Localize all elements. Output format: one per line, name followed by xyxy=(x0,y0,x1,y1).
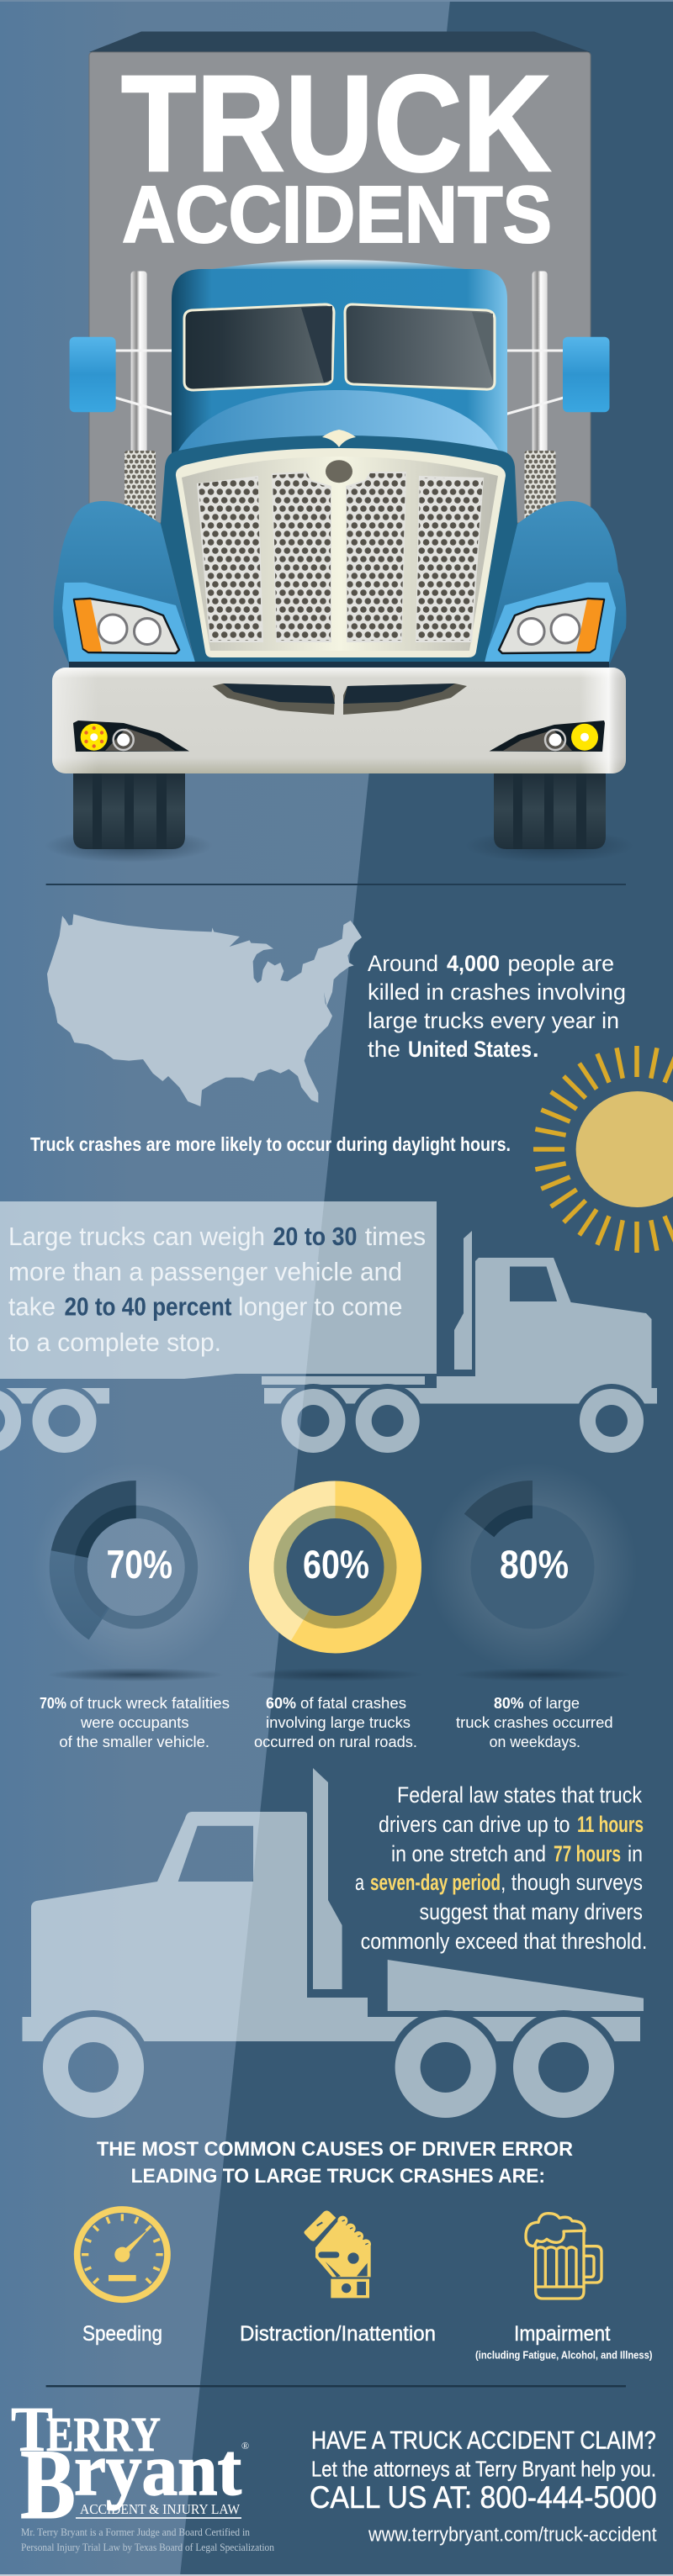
left fog lights xyxy=(73,721,189,752)
text: truck weight and stopping distance xyxy=(8,1222,426,1357)
trailer box xyxy=(89,52,591,523)
bumper xyxy=(52,668,626,773)
grille xyxy=(176,448,506,657)
left fender xyxy=(53,501,195,664)
hood xyxy=(178,390,500,452)
label: distraction: Distraction/Inattention xyxy=(240,2322,436,2346)
divider xyxy=(46,884,626,885)
text: daylight hours: Truck crashes are more likely to occur during daylight hours. xyxy=(30,1133,511,1155)
map: United States xyxy=(47,914,362,1106)
text: federal hours law xyxy=(355,1782,647,1954)
logo: Terry Bryant: ACCIDENT & INJURY LAW xyxy=(80,2501,241,2517)
disclaimer xyxy=(21,2526,274,2553)
donut chart: 70% xyxy=(31,1462,241,1672)
text: 4,000 people killed: killed in crashes involving xyxy=(368,979,626,1005)
divider xyxy=(46,2385,626,2387)
grille panel 1 xyxy=(197,476,263,642)
illustration: front of blue truck xyxy=(45,32,633,863)
caption: 60%: 60% xyxy=(266,1695,296,1712)
text: federal hours law: Federal law states that truck xyxy=(397,1782,642,1808)
right mirror xyxy=(563,337,609,412)
icon: speedometer xyxy=(77,2209,167,2299)
caption: 70% xyxy=(40,1695,230,1750)
text: federal hours law: , though surveys xyxy=(501,1870,643,1895)
right fog lights xyxy=(490,721,605,752)
right bumper vent xyxy=(343,684,467,715)
text: 4,000 people killed: large trucks every year in xyxy=(368,1008,619,1033)
grille panel 2 xyxy=(272,472,331,642)
label: impairment: Impairment xyxy=(514,2322,611,2346)
text: federal hours law: in xyxy=(628,1841,643,1866)
hood emblem xyxy=(322,430,356,447)
illustration: large truck silhouette xyxy=(22,1768,644,2118)
caption: 70%: of truck wreck fatalities xyxy=(70,1695,230,1712)
grille panel 3 xyxy=(346,472,406,642)
title: ACCIDENTS xyxy=(122,170,552,260)
right exhaust stack xyxy=(525,271,555,521)
text: 4,000 people killed: the xyxy=(368,1037,400,1062)
right tire shadow xyxy=(465,829,633,863)
caption: 60%: involving large trucks xyxy=(266,1714,411,1731)
text: truck weight and stopping distance: 20 to 30 xyxy=(273,1222,357,1251)
text: federal hours law: a xyxy=(355,1870,365,1895)
text: federal hours law: seven-day period xyxy=(370,1870,501,1895)
heading: causes of driver error: LEADING TO LARGE TRUCK CRASHES ARE: xyxy=(131,2165,545,2188)
caption: 60%: occurred on rural roads. xyxy=(254,1734,417,1750)
bumper shadow strip xyxy=(69,662,609,669)
logo: Terry Bryant: ryant xyxy=(74,2430,241,2511)
text: federal hours law: suggest that many drivers xyxy=(419,1899,643,1924)
donut chart: 80% xyxy=(427,1462,638,1672)
left tire xyxy=(73,769,185,849)
caption: 70%: 70% xyxy=(40,1695,66,1712)
text: truck weight and stopping distance: Large trucks can weigh xyxy=(8,1222,265,1251)
title: TRUCK xyxy=(121,46,551,200)
caption: 70%: of the smaller vehicle. xyxy=(59,1734,209,1750)
text: 4,000 people killed: Around xyxy=(368,951,438,976)
left mirror xyxy=(70,337,116,412)
donut chart: 70%: 70% xyxy=(106,1542,172,1586)
grille panel 4 xyxy=(416,476,484,642)
disclaimer: Personal Injury Trial Law by Texas Board of Legal Specialization xyxy=(21,2541,274,2553)
right windshield xyxy=(345,304,495,389)
caption: 60%: of fatal crashes xyxy=(300,1695,406,1712)
caption: 80%: 80% xyxy=(494,1695,523,1712)
text: truck weight and stopping distance: take xyxy=(8,1291,56,1322)
text: truck weight and stopping distance: 20 to 40 percent xyxy=(64,1291,232,1322)
text: federal hours law: drivers can drive up to xyxy=(379,1812,570,1837)
grille frame xyxy=(161,435,517,662)
trailer box roof xyxy=(89,32,591,52)
donut chart: 60%: 60% xyxy=(303,1542,369,1586)
left exhaust stack xyxy=(125,271,156,521)
right headlight xyxy=(499,599,604,653)
caption: 60% xyxy=(254,1695,417,1750)
logo: Terry Bryant xyxy=(11,2394,249,2540)
logo: Terry Bryant: B xyxy=(20,2428,76,2540)
call to action xyxy=(310,2427,657,2547)
donut chart: 80%: 80% xyxy=(500,1542,569,1586)
grille badge xyxy=(326,460,352,483)
caption: 80%: of large xyxy=(528,1695,580,1712)
icon: beer mug xyxy=(526,2214,601,2299)
text: federal hours law: in one stretch and xyxy=(391,1841,546,1866)
donut shadows xyxy=(47,1668,631,1681)
caption: 80%: truck crashes occurred xyxy=(456,1714,613,1731)
cab xyxy=(172,260,507,504)
text: 4,000 people killed: . xyxy=(533,1037,539,1062)
left bumper vent xyxy=(212,684,335,715)
right fender xyxy=(483,501,627,664)
illustration: truck and trailer silhouette xyxy=(0,1201,657,1453)
logo: Terry Bryant: T xyxy=(11,2394,53,2465)
mirror brackets xyxy=(115,351,564,414)
text: truck weight and stopping distance: more than a passenger vehicle and xyxy=(8,1257,402,1286)
title xyxy=(121,46,552,260)
text: 4,000 people killed: people are xyxy=(508,951,614,976)
caption: 80% xyxy=(456,1695,613,1750)
label: speeding: Speeding xyxy=(82,2322,162,2346)
text: federal hours law: 77 hours xyxy=(554,1841,621,1866)
icon: hand holding phone xyxy=(304,2210,371,2298)
text: truck weight and stopping distance: longer to come xyxy=(238,1291,402,1322)
left windshield xyxy=(184,304,334,390)
disclaimer: Mr. Terry Bryant is a Former Judge and Board Certified in xyxy=(21,2526,250,2538)
caption: 80%: on weekdays. xyxy=(490,1734,580,1750)
donut chart: 60% xyxy=(249,1481,421,1653)
heading: causes of driver error xyxy=(97,2138,573,2188)
caption: 70%: were occupants xyxy=(80,1714,188,1731)
text: federal hours law: 11 hours xyxy=(577,1812,644,1837)
text: truck weight and stopping distance: times xyxy=(365,1222,426,1251)
text: 4,000 people killed: 4,000 xyxy=(447,951,500,976)
left tire shadow xyxy=(45,829,213,863)
logo: Terry Bryant: ERRY xyxy=(46,2407,161,2462)
text: 4,000 people killed xyxy=(368,951,626,1062)
icon: sun xyxy=(533,1046,673,1253)
heading: causes of driver error: THE MOST COMMON CAUSES OF DRIVER ERROR xyxy=(97,2138,573,2161)
text: truck weight and stopping distance: to a complete stop. xyxy=(8,1328,221,1357)
text: 4,000 people killed: United States xyxy=(408,1037,532,1062)
right tire xyxy=(494,769,606,849)
left headlight xyxy=(74,599,179,653)
logo: Terry Bryant: ® xyxy=(241,2440,249,2452)
